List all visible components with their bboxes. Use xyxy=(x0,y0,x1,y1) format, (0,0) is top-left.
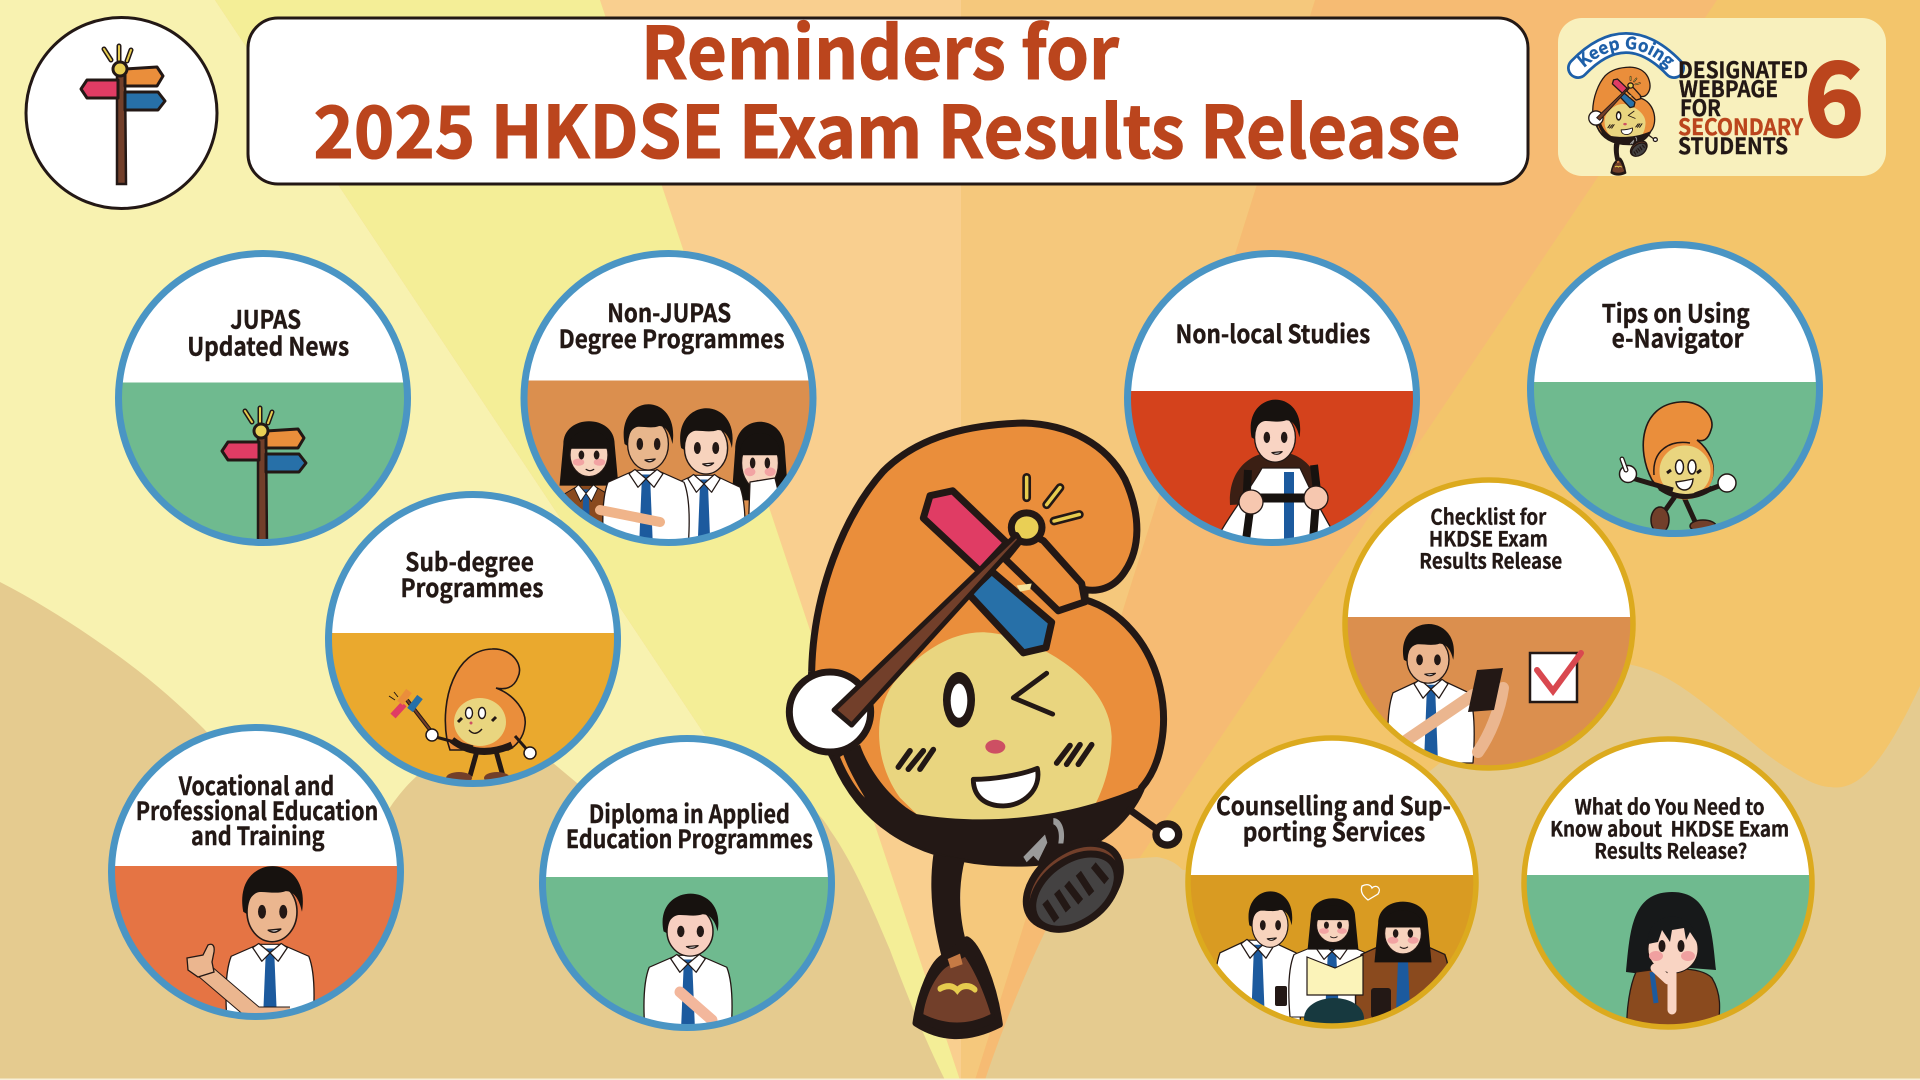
badge: designated webpage for secondary students 6: SECONDARY xyxy=(1678,110,1803,142)
panel: Non-local Studies xyxy=(1120,253,1430,561)
panel: What do You Need to Know about HKDSE Exam Results Release? xyxy=(1515,739,1825,1045)
badge: designated webpage for secondary students 6: WEBPAGE xyxy=(1679,72,1778,104)
panel: Diploma in Applied Education Programmes: Education Programmes xyxy=(566,820,813,856)
central mascot character xyxy=(789,423,1182,1036)
badge: designated webpage for secondary students 6: 6 xyxy=(1804,19,1864,166)
panel: Vocational and Professional Education and Training: and Training xyxy=(191,817,325,853)
panel: What do You Need to Know about HKDSE Exam Results Release?: Know about HKDSE Exam xyxy=(1550,814,1789,844)
panel: Non-local Studies: Non-local Studies xyxy=(1176,315,1370,351)
badge: designated webpage for secondary students 6: STUDENTS xyxy=(1678,129,1788,161)
title panel: 2025 HKDSE Exam Results Release xyxy=(314,74,1460,179)
badge: designated webpage for secondary students 6: DESIGNATED xyxy=(1678,53,1808,85)
badge: designated webpage for secondary students 6: FOR xyxy=(1680,91,1721,123)
panel: Checklist for HKDSE Exam Results Release: Results Release xyxy=(1419,546,1562,576)
panel: Checklist for HKDSE Exam Results Release: HKDSE Exam xyxy=(1429,524,1548,554)
panel: Non-JUPAS Degree Programmes: Degree Programmes xyxy=(559,320,785,356)
panel: Vocational and Professional Education and Training: Professional Education xyxy=(136,792,378,828)
panel: Non-JUPAS Degree Programmes xyxy=(515,253,825,559)
panel: Diploma in Applied Education Programmes: Diploma in Applied xyxy=(589,795,790,831)
panel: JUPAS Updated News: JUPAS xyxy=(230,300,301,336)
panel: Counselling and Supporting Services: Counselling and Sup- xyxy=(1216,787,1451,823)
panel: What do You Need to Know about HKDSE Exam Results Release?: Results Release? xyxy=(1594,836,1747,866)
panel: Checklist for HKDSE Exam Results Release: Checklist for xyxy=(1430,502,1547,532)
panel: JUPAS Updated News: Updated News xyxy=(187,328,349,364)
panel: Vocational and Professional Education and Training: Vocational and xyxy=(178,767,334,803)
panel: Non-JUPAS Degree Programmes: Non-JUPAS xyxy=(607,294,731,330)
panel: Vocational and Professional Education and Training xyxy=(100,727,410,1036)
panel: Checklist for HKDSE Exam Results Release xyxy=(1340,480,1640,787)
panel: Counselling and Supporting Services: porting Services xyxy=(1243,813,1425,849)
panel: JUPAS Updated News xyxy=(110,253,420,552)
panel: Tips on Using e-Navigator xyxy=(1520,244,1830,552)
panel: Tips on Using e-Navigator: Tips on Using xyxy=(1602,295,1750,331)
panel: Counselling and Supporting Services xyxy=(1180,738,1480,1045)
panel: What do You Need to Know about HKDSE Exam Results Release?: What do You Need to xyxy=(1575,792,1765,822)
badge: designated webpage for secondary students 6 xyxy=(1558,18,1886,176)
panel: Sub-degree Programmes: Programmes xyxy=(400,569,544,605)
badge: designated webpage for secondary students 6: Keep Going xyxy=(1576,36,1674,70)
panel: Tips on Using e-Navigator: e-Navigator xyxy=(1612,319,1744,355)
panel: Sub-degree Programmes: Sub-degree xyxy=(405,543,534,579)
panel: Sub-degree Programmes xyxy=(320,494,630,803)
header emblem: signpost in white circle xyxy=(26,18,217,208)
title panel xyxy=(248,0,1528,184)
panel: Diploma in Applied Education Programmes xyxy=(530,738,840,1047)
